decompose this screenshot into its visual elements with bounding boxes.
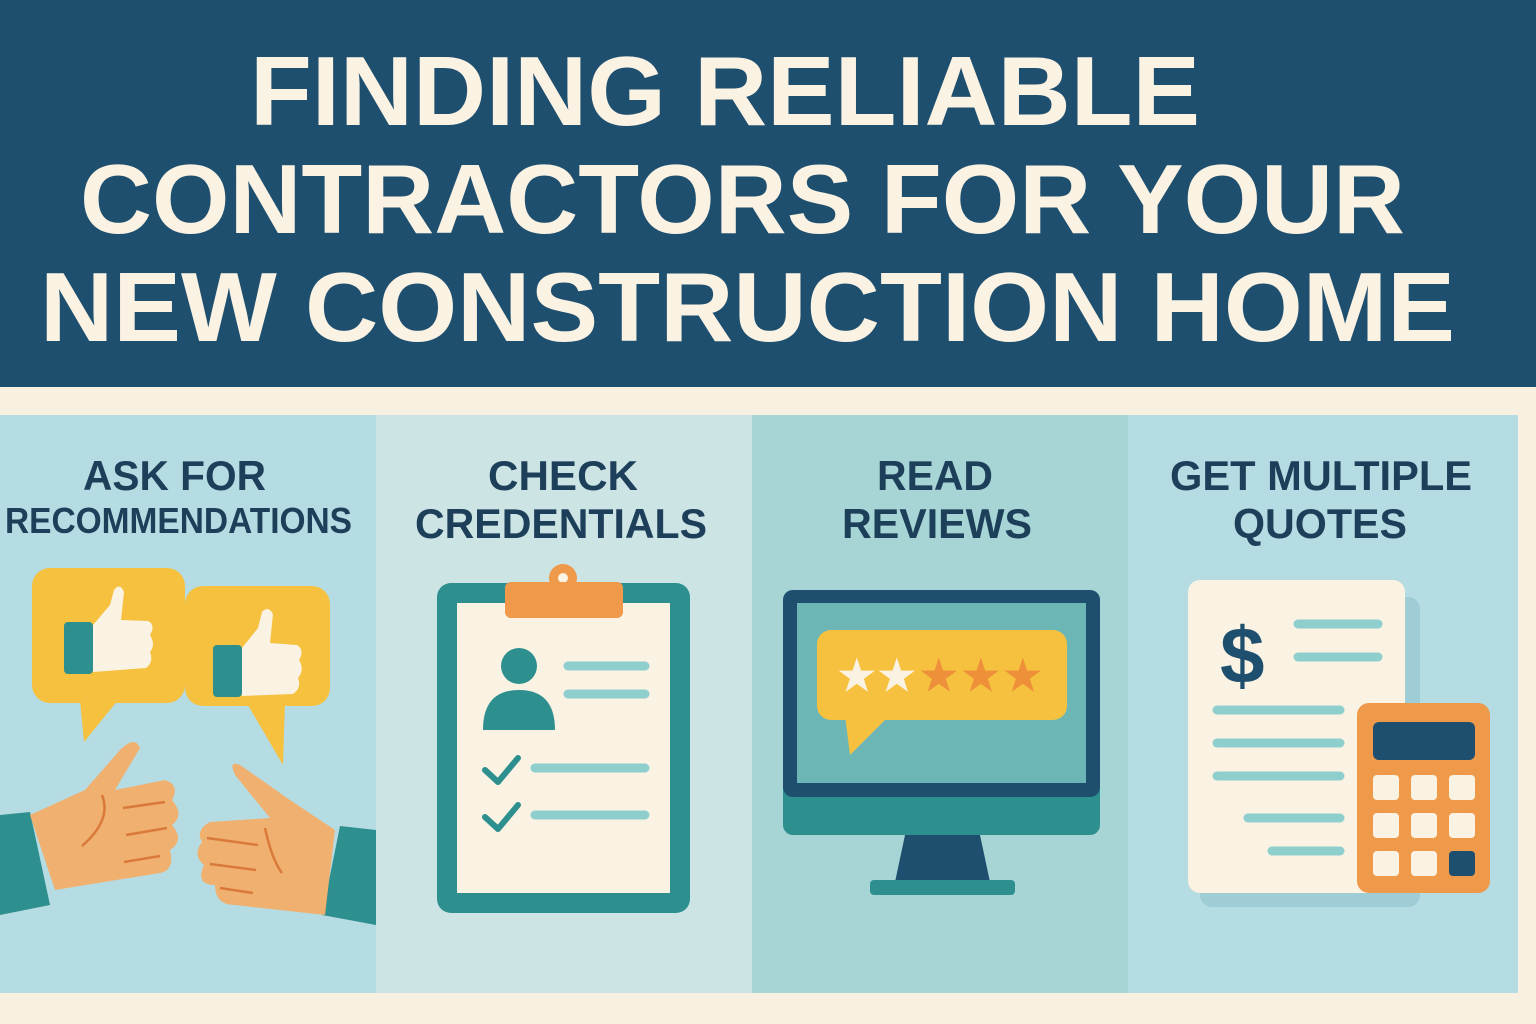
heading: get multiple quotes: GET MULTIPLE [1170,452,1472,499]
title: NEW CONSTRUCTION HOME [40,252,1455,362]
title [40,36,1455,362]
heading: read reviews: REVIEWS [842,500,1032,547]
panel: read reviews [752,415,1128,993]
icon: hands [0,742,376,925]
icon: monitor with review: ★ [878,652,916,699]
icon: monitor with review [783,590,1100,895]
heading: get multiple quotes [1170,452,1472,547]
icon: monitor with review: ★ [838,652,876,699]
panel: get multiple quotes [1128,415,1518,993]
heading: ask for recommendations: RECOMMENDATIONS [5,500,352,541]
heading: read reviews: READ [877,452,993,499]
panel: ask for recommendations [0,415,376,993]
heading: check credentials: CHECK [488,452,638,499]
heading: ask for recommendations: ASK FOR [83,452,266,499]
icon: monitor with review: ★ [920,652,958,699]
heading: read reviews [842,452,1032,547]
icon: monitor with review: ★ [1004,652,1042,699]
icon: monitor with review: ★ [962,652,1000,699]
heading: check credentials [415,452,707,547]
icon: quote document and calculator: $ [1220,611,1264,700]
heading: get multiple quotes: QUOTES [1233,500,1407,547]
icon: quote document and calculator [1188,580,1490,907]
heading: check credentials: CREDENTIALS [415,500,707,547]
title: CONTRACTORS FOR YOUR [80,144,1405,254]
title: FINDING RELIABLE [250,36,1200,146]
icon: thumbs up bubbles [32,568,330,765]
heading: ask for recommendations [5,452,352,541]
panel: check credentials [376,415,752,993]
header banner [0,0,1536,387]
icon: clipboard [437,564,690,913]
